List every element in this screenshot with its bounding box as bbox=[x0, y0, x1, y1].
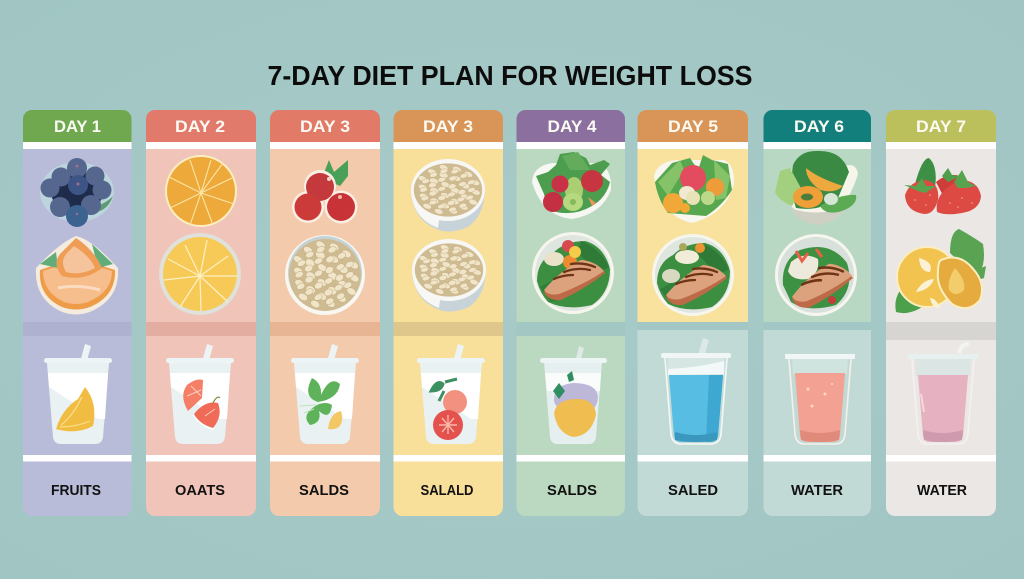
icon: oats bowl bottom bbox=[404, 236, 494, 312]
header: day 6 bbox=[764, 110, 871, 142]
icon: sliced peach bowl bbox=[36, 236, 118, 314]
header: day 3 bbox=[270, 110, 380, 142]
label: fruits: FRUITS bbox=[51, 483, 101, 499]
icon: salmon salad plate bbox=[775, 234, 857, 316]
label: water: WATER bbox=[917, 483, 968, 499]
icon: strawberries bbox=[904, 158, 981, 214]
icon: blue water glass bbox=[661, 338, 731, 444]
icon: orange slice bbox=[165, 155, 237, 227]
icon: cherries bbox=[292, 160, 358, 224]
icon: rose water glass bbox=[908, 344, 978, 444]
label: saled: SALED bbox=[668, 483, 718, 499]
header: day 1: DAY 1 bbox=[54, 117, 101, 136]
icon: grapefruit cup bbox=[166, 344, 234, 444]
header: second day 3: DAY 3 bbox=[423, 117, 473, 136]
panel: day 4 salads bbox=[516, 110, 625, 516]
header: day 7 bbox=[886, 110, 996, 142]
label: salald: SALALD bbox=[420, 483, 474, 499]
panel: day 5 saled bbox=[638, 110, 748, 516]
header: second day 3 bbox=[394, 110, 503, 142]
icon: blueberries bbox=[40, 158, 114, 227]
icon: oats bowl bbox=[277, 229, 372, 322]
header: day 4 bbox=[516, 110, 625, 142]
title: 7-DAY DIET PLAN FOR WEIGHT LOSS bbox=[268, 60, 752, 91]
label: water: WATER bbox=[791, 483, 844, 499]
panel: day 3 salads bbox=[270, 110, 380, 516]
icon: greens and apricot bowl bbox=[775, 151, 858, 225]
panel: day 1 fruits bbox=[23, 110, 132, 516]
panel: day 6 water bbox=[764, 110, 871, 516]
icon: herb cup bbox=[291, 344, 359, 444]
icon: lemon and pear bbox=[895, 229, 986, 313]
header: day 1 bbox=[23, 110, 132, 142]
header: day 7: DAY 7 bbox=[916, 117, 966, 136]
panel: day 2 oats bbox=[146, 110, 256, 516]
icon: pink water glass bbox=[785, 354, 855, 444]
header: day 4: DAY 4 bbox=[548, 117, 597, 136]
header: day 5 bbox=[638, 110, 748, 142]
label: oats: OAATS bbox=[175, 483, 225, 499]
icon: lavender and citrus cup bbox=[540, 346, 607, 444]
icon: salmon salad plate bbox=[652, 234, 734, 316]
panel: day 3 salald bbox=[394, 110, 503, 516]
header: day 5: DAY 5 bbox=[668, 117, 718, 136]
header: day 2 bbox=[146, 110, 256, 142]
icon: oats bowl top bbox=[403, 156, 493, 232]
header: day 3: DAY 3 bbox=[300, 117, 350, 136]
icon: berry salad bowl bbox=[532, 152, 611, 219]
label: salads: SALDS bbox=[299, 483, 349, 499]
header: day 6: DAY 6 bbox=[794, 117, 844, 136]
header: day 2: DAY 2 bbox=[175, 117, 225, 136]
panel: day 7 water bbox=[886, 110, 996, 516]
icon: lemon slice in bowl bbox=[159, 233, 241, 315]
icon: lemon cup bbox=[44, 344, 112, 444]
icon: salmon salad plate bbox=[532, 232, 614, 314]
label: salads: SALDS bbox=[547, 483, 597, 499]
icon: tomato cup bbox=[417, 344, 485, 444]
icon: mixed salad bowl bbox=[654, 155, 734, 223]
